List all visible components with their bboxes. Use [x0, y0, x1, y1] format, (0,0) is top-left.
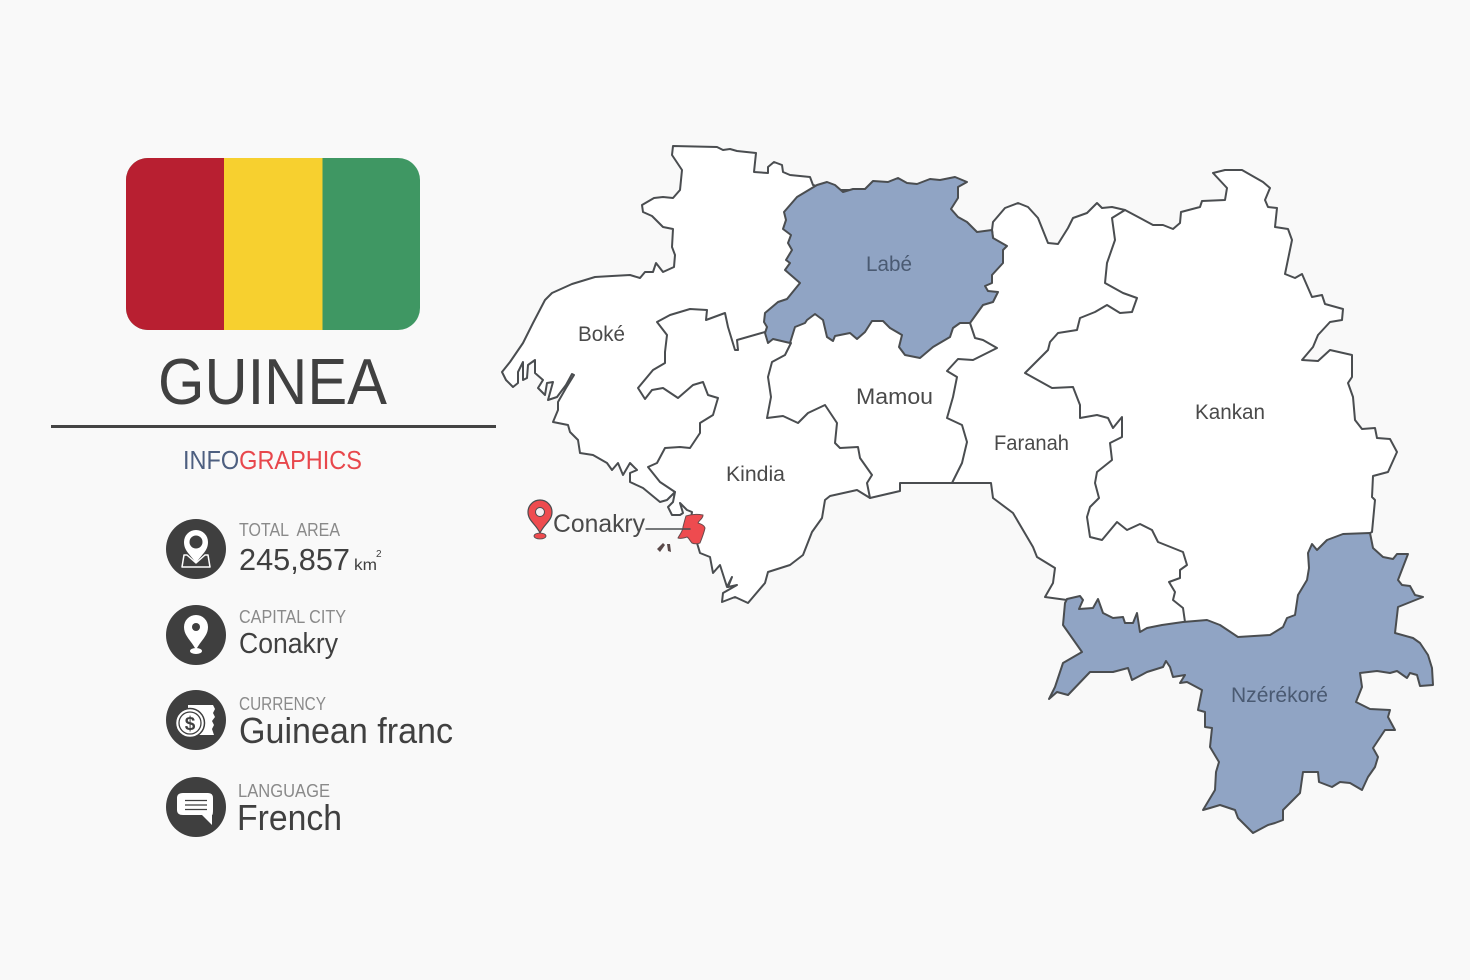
islands [657, 543, 671, 552]
value: 245,857 [239, 542, 350, 577]
country outline [502, 146, 1397, 650]
unit exponent: 2 [376, 549, 382, 560]
value: French [237, 797, 342, 838]
capital region: Conakry [678, 514, 705, 544]
label: CAPITAL CITY [239, 607, 346, 627]
value: Guinean franc [239, 710, 453, 751]
item: total area [166, 519, 382, 579]
label: TOTAL AREA [239, 520, 340, 540]
label: Conakry: Conakry [553, 510, 645, 538]
border: Faranah / Kankan [1025, 210, 1187, 622]
border: Mamou / Faranah [947, 323, 997, 483]
leader line [646, 528, 690, 530]
label: Boké: Boké [578, 323, 625, 346]
region: Labé [764, 177, 1007, 358]
item: capital city [166, 605, 346, 665]
icon: location pin [166, 605, 226, 665]
unit: km [354, 557, 377, 574]
border: Kindia / Mamou [767, 343, 872, 498]
icon: coins [166, 690, 226, 750]
border: Boké / Kindia [638, 309, 765, 492]
title rule [51, 425, 496, 428]
label: Labé: Labé [866, 253, 912, 276]
label: Kindia: Kindia [726, 463, 785, 486]
flag of Guinea [126, 158, 420, 330]
subtitle: INFOGRAPHICS [183, 445, 362, 475]
value: Conakry [239, 628, 338, 660]
label: Kankan: Kankan [1195, 401, 1265, 424]
panel: country summary [51, 158, 496, 838]
map of Guinea [502, 146, 1433, 833]
label: LANGUAGE [238, 781, 330, 801]
capital pin [528, 500, 552, 539]
title: GUINEA [158, 345, 388, 418]
region borders [638, 210, 1187, 622]
item: language [166, 777, 342, 838]
icon: map pin on map [166, 519, 226, 579]
icon: speech bubble [166, 777, 226, 837]
label: CURRENCY [239, 694, 326, 714]
label: Nzérékoré: Nzérékoré [1231, 684, 1328, 707]
label: Mamou: Mamou [856, 384, 933, 409]
label: Faranah: Faranah [994, 432, 1069, 455]
icon: coins: $ [185, 714, 196, 735]
region: Nzérékoré [1049, 533, 1433, 833]
item: currency [166, 690, 453, 751]
